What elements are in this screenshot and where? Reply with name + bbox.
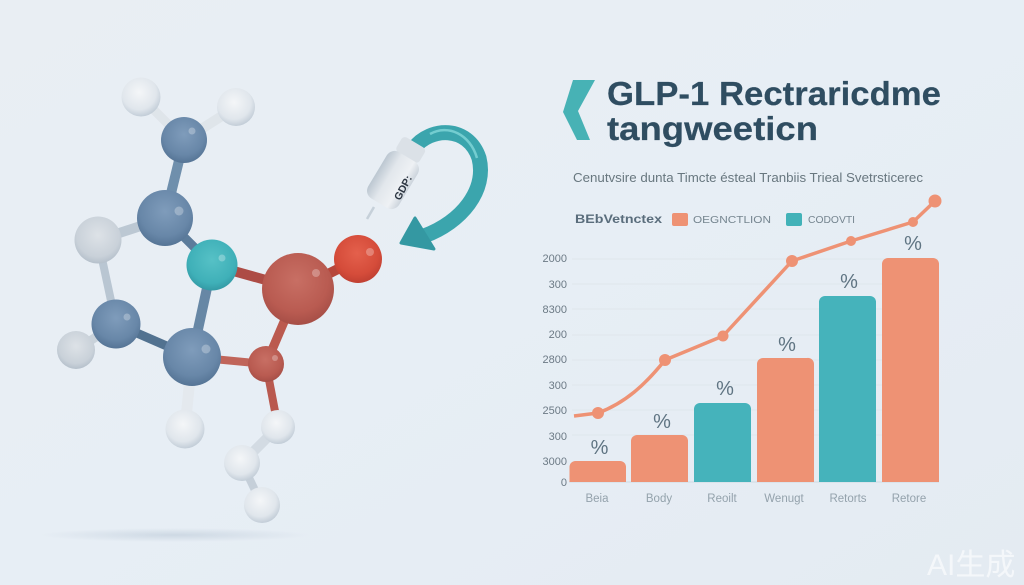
percent labels: [591, 233, 922, 459]
icon: curved teal arrow: [401, 130, 480, 249]
y axis labels: 300: [549, 279, 567, 291]
percent labels: %: [778, 334, 796, 356]
percent labels: %: [904, 233, 922, 255]
legend: OEGNCTLION: [693, 215, 771, 226]
x axis labels: Retorts: [829, 493, 867, 505]
watermark: AI生成: [927, 549, 1015, 582]
icon: injection vial: [364, 136, 427, 219]
bars: [570, 461, 626, 482]
icon: title chevron: [563, 80, 595, 140]
legend: [575, 212, 855, 226]
y axis labels: 300: [549, 380, 567, 392]
y axis labels: [543, 253, 567, 489]
y axis labels: 300: [549, 431, 567, 443]
legend: CODOVTI: [808, 215, 855, 226]
subtitle: Cenutvsire dunta Timcte ésteal Tranbiis Trieal Svetrsticerec: [573, 171, 923, 185]
y axis labels: 2000: [543, 253, 567, 265]
y axis labels: 2500: [543, 405, 567, 417]
bar chart: [543, 233, 939, 505]
y axis labels: 0: [561, 477, 567, 489]
gridlines: [572, 259, 938, 435]
y axis labels: 2800: [543, 354, 567, 366]
percent labels: %: [653, 411, 671, 433]
x axis labels: Beia: [585, 493, 609, 505]
x axis labels: [585, 493, 926, 505]
line chart: [574, 194, 942, 419]
y axis labels: 8300: [543, 304, 567, 316]
percent labels: %: [716, 378, 734, 400]
x axis labels: Body: [646, 493, 672, 505]
vial label: GDP:: [392, 174, 415, 202]
legend: BEbVetnctex: [575, 212, 662, 226]
y axis labels: 200: [549, 329, 567, 341]
x axis labels: Retore: [892, 493, 926, 505]
x axis labels: Wenugt: [764, 493, 805, 505]
x axis labels: Reoilt: [707, 493, 738, 505]
molecule atoms: [57, 78, 382, 523]
molecule illustration: [40, 78, 382, 542]
atom highlights: [124, 128, 374, 361]
molecule bonds: [76, 97, 358, 505]
title: tangweeticn: [607, 110, 818, 147]
title: GLP-1 Rectraricdme: [607, 75, 941, 112]
y axis labels: 3000: [543, 456, 567, 468]
baseline: [569, 481, 939, 483]
percent labels: %: [591, 437, 609, 459]
percent labels: %: [840, 271, 858, 293]
